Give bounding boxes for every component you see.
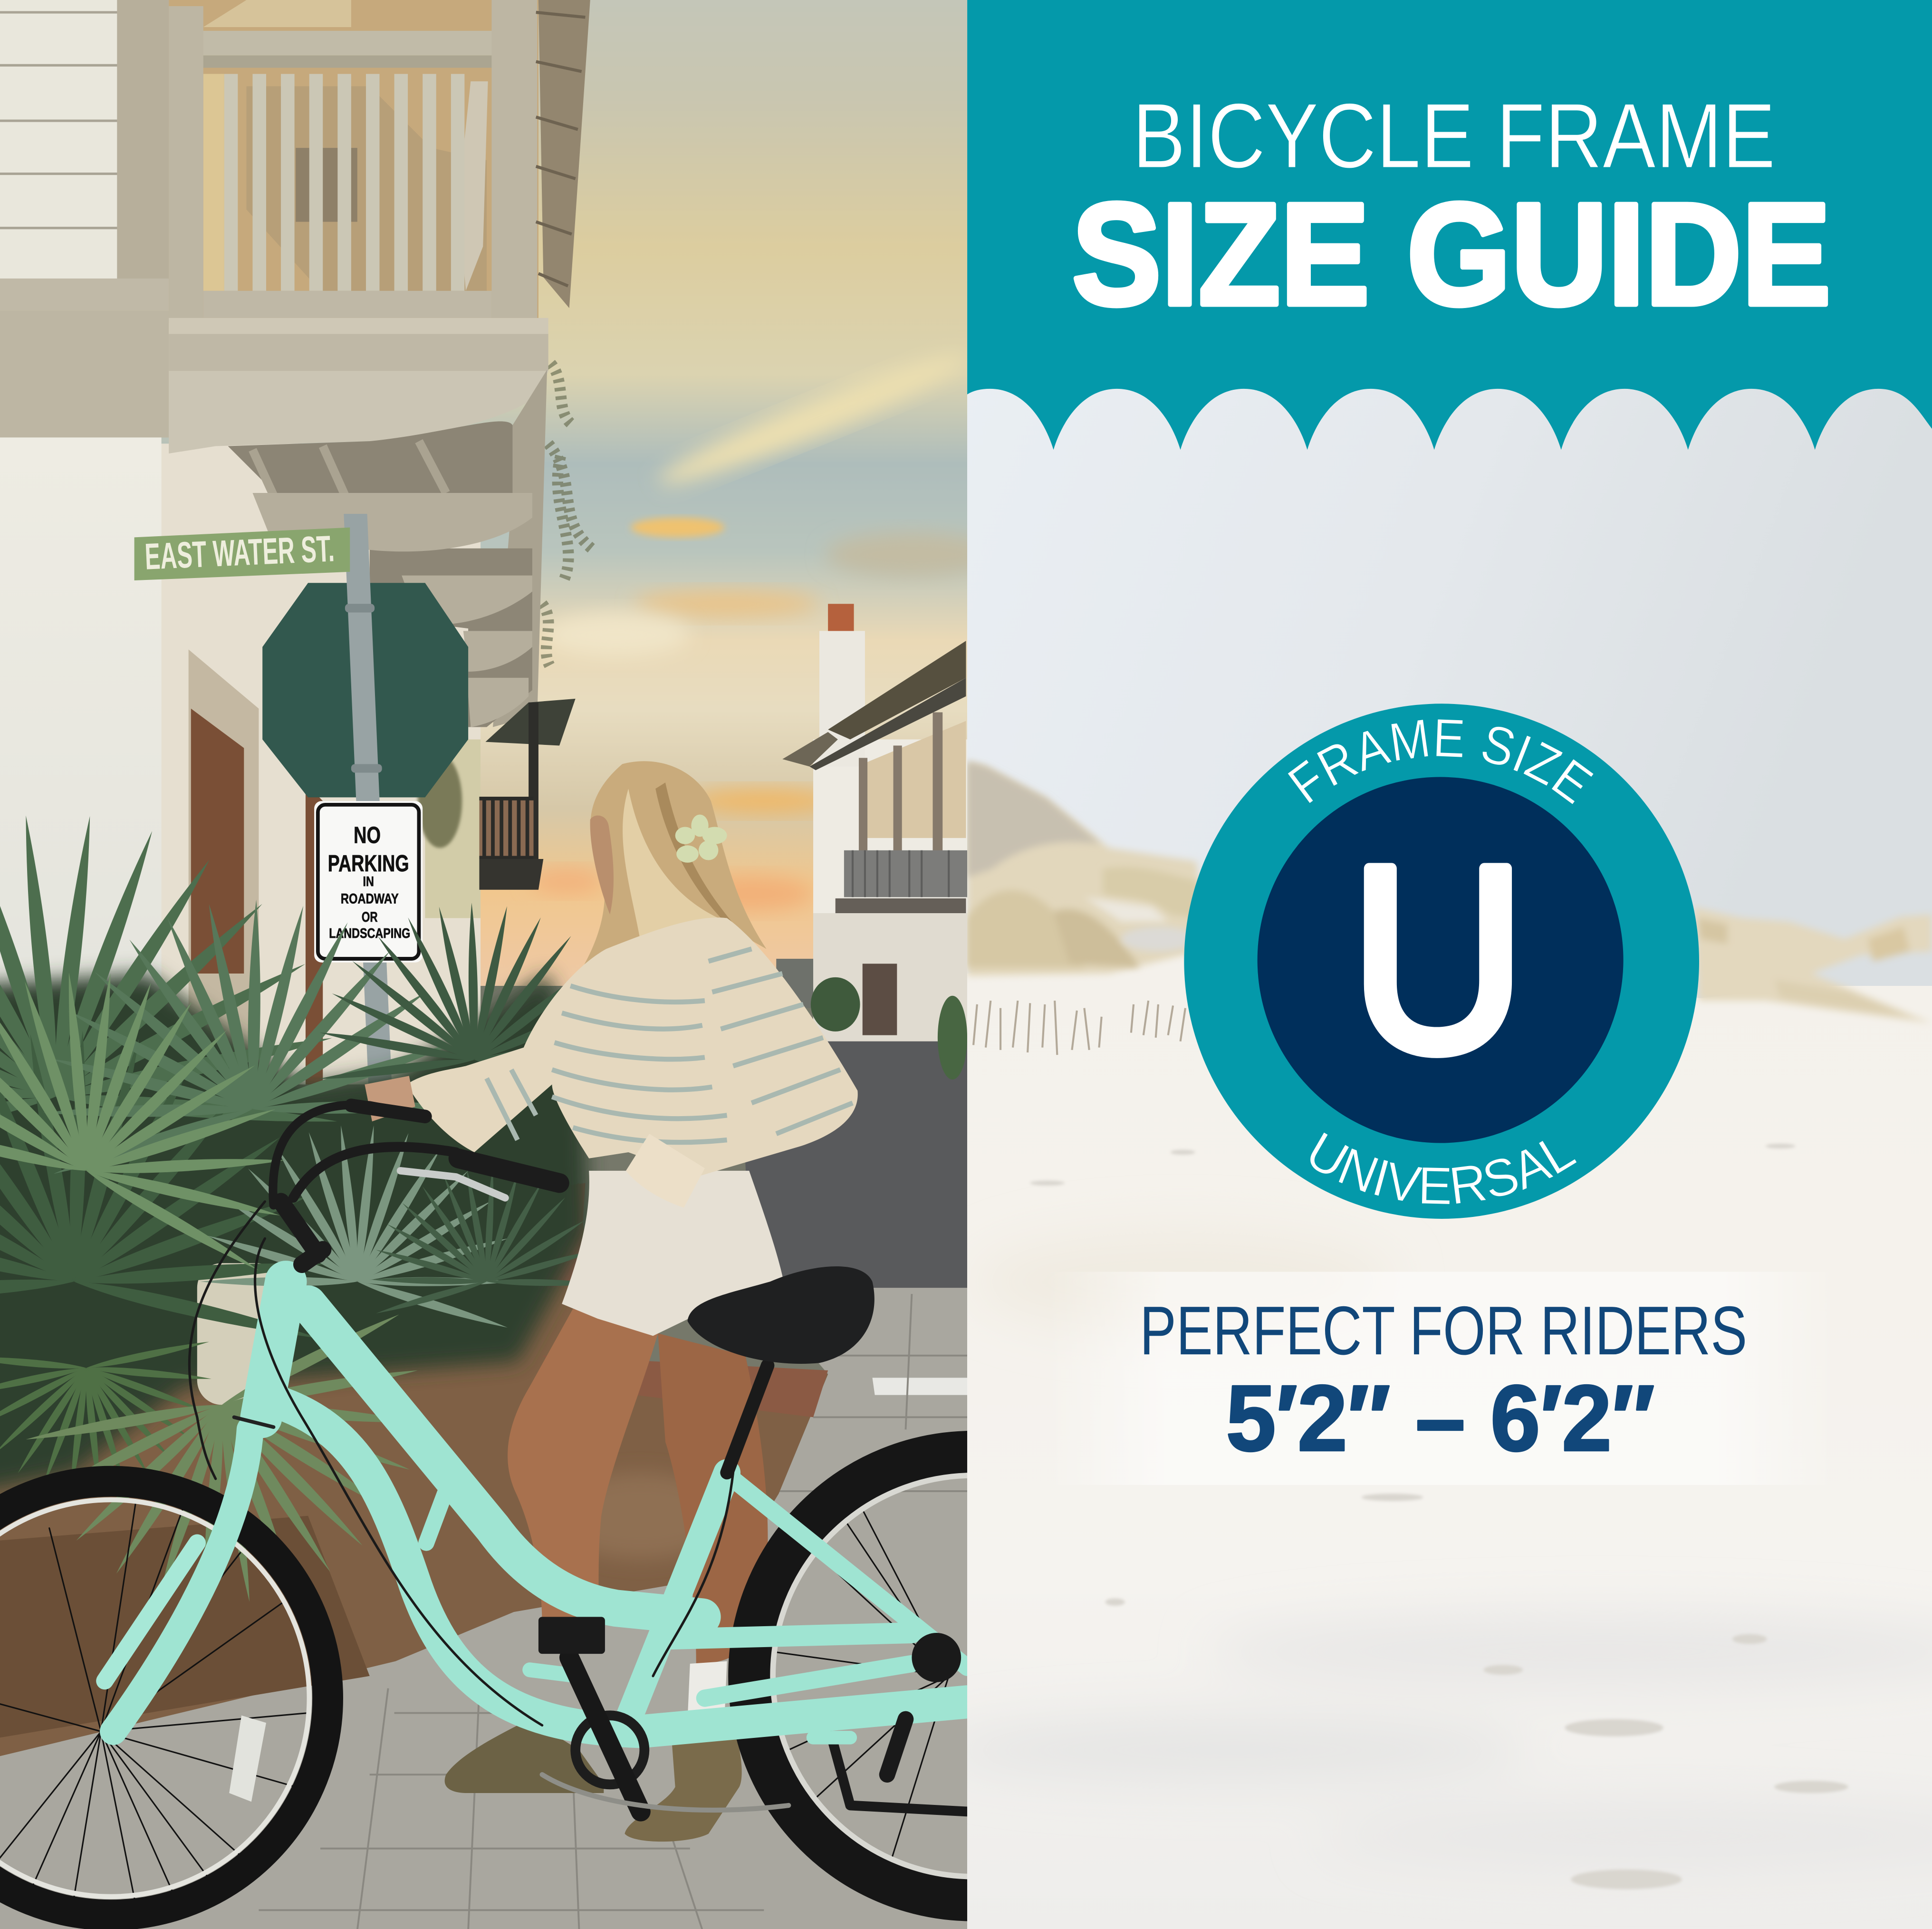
panel: cyclist photo bbox=[0, 0, 968, 1929]
frame size badge bbox=[1184, 704, 1699, 1219]
bicycle bbox=[0, 1105, 1198, 1915]
text backdrop band bbox=[1048, 1272, 1836, 1485]
rider height caption bbox=[1140, 1292, 1747, 1470]
no parking sign: PARKING bbox=[328, 850, 409, 877]
saddle bbox=[688, 1266, 875, 1364]
palmetto plants bbox=[0, 815, 644, 1648]
soffit bbox=[228, 421, 512, 495]
dark balcony on far wall bbox=[479, 699, 576, 890]
no parking sign: ROADWAY bbox=[341, 891, 399, 907]
white wall bbox=[0, 437, 162, 1084]
frame tubes bbox=[105, 1282, 967, 1731]
badge arc text bottom: UNIVERSAL bbox=[1297, 1120, 1585, 1216]
sweater bbox=[407, 917, 858, 1177]
sand path bbox=[1084, 897, 1168, 922]
hand bbox=[365, 1076, 415, 1121]
shorts bbox=[562, 1171, 784, 1336]
photo base tone bbox=[0, 986, 828, 1756]
dry sticks bbox=[973, 1001, 1185, 1055]
sand bbox=[967, 918, 1932, 1929]
left grass tufts bbox=[967, 867, 1198, 967]
hair bbox=[579, 761, 767, 974]
right grass bbox=[1694, 907, 1932, 1023]
far siding and vine bbox=[425, 739, 481, 918]
drivetrain and pedal bbox=[538, 1617, 967, 1812]
sign pole bbox=[344, 514, 392, 1084]
sand marks and footprints bbox=[1030, 1144, 1848, 1889]
rider bbox=[365, 761, 858, 1842]
cables bbox=[189, 1202, 733, 1725]
brake lever bbox=[401, 1171, 505, 1198]
no parking sign: LANDSCAPING bbox=[329, 926, 410, 941]
wall base bbox=[160, 444, 481, 1084]
panel: beach dunes bbox=[936, 0, 1932, 1929]
badge inner circle bbox=[1258, 777, 1624, 1143]
sweater cuffs bbox=[626, 1134, 705, 1208]
sand shadows bbox=[936, 1232, 1932, 1868]
road bbox=[739, 1035, 967, 1294]
legs bbox=[508, 1309, 768, 1664]
sidewalk pavers bbox=[0, 1288, 967, 1929]
badge letter U: U bbox=[1350, 811, 1526, 1106]
beige house bbox=[0, 0, 590, 1084]
street sign bbox=[135, 528, 350, 580]
badge outer ring bbox=[1184, 704, 1699, 1219]
no parking sign bbox=[314, 801, 423, 963]
header banner with scalloped edge bbox=[967, 0, 1932, 450]
front wheel bbox=[0, 1481, 328, 1915]
no parking sign: IN bbox=[363, 874, 374, 889]
sunset sky bbox=[0, 0, 998, 986]
no parking sign: NO bbox=[354, 822, 381, 848]
boots bbox=[445, 1717, 742, 1842]
handlebars and stem bbox=[273, 1105, 559, 1264]
street sign: EAST WATER ST. bbox=[144, 528, 336, 578]
stop sign back bbox=[262, 583, 468, 797]
socks bbox=[688, 1661, 727, 1719]
garage door bbox=[191, 709, 244, 974]
brick and pine mulch bbox=[0, 1183, 828, 1756]
head tube collar bbox=[234, 1417, 274, 1427]
badge arc text top: FRAME SIZE bbox=[1278, 708, 1603, 815]
no parking sign: OR bbox=[362, 909, 378, 925]
left dune bbox=[967, 762, 1208, 1055]
balcony slats bbox=[224, 74, 464, 291]
title line 1: BICYCLE FRAME bbox=[1132, 85, 1776, 188]
title line 2: SIZE GUIDE bbox=[1072, 173, 1831, 335]
caption line: PERFECT FOR RIDERS bbox=[1140, 1292, 1747, 1369]
height range: 5′2″ – 6′2″ bbox=[1226, 1366, 1655, 1470]
olive tree behind house bbox=[542, 364, 591, 666]
roof eave bbox=[538, 0, 590, 308]
pale sky bbox=[967, 0, 1932, 1023]
rear wheel bbox=[749, 1452, 1198, 1900]
door frame bbox=[189, 649, 259, 1084]
balcony interior bbox=[169, 0, 538, 323]
seat post bbox=[727, 1365, 768, 1473]
distant house bbox=[776, 604, 967, 1080]
flower clip bbox=[675, 815, 727, 863]
